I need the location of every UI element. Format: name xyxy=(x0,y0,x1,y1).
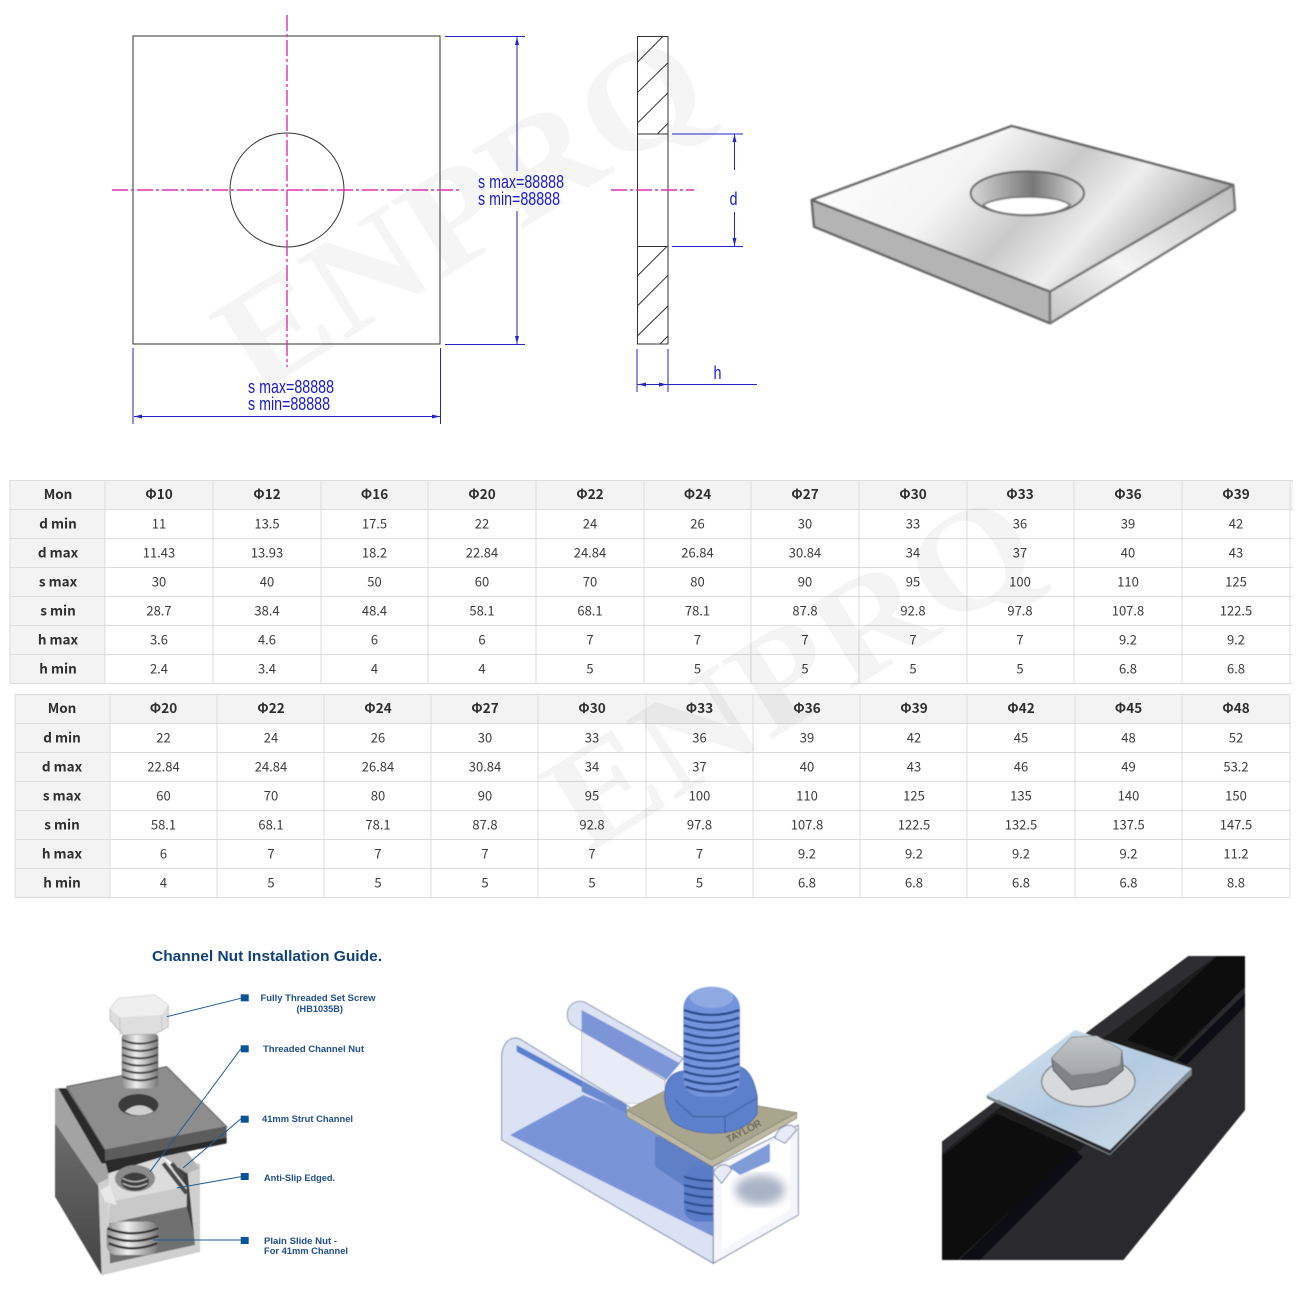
table 2 row h max: 9.2 xyxy=(798,844,816,862)
table 1 row s max: 95 xyxy=(906,572,920,590)
callout: HB1035B: (HB1035B) xyxy=(296,1004,343,1014)
table 1 row s min: 38.4 xyxy=(254,600,280,620)
table 1 row d min: 22 xyxy=(475,514,489,532)
table 1 header row: Φ20 xyxy=(468,483,496,503)
table 2 row s max: 140 xyxy=(1118,786,1139,804)
table 1 row h max: 9.2 xyxy=(1119,630,1137,648)
table 1 header row: Φ24 xyxy=(684,483,711,503)
table 1 row h min xyxy=(39,658,1245,678)
table 2 row h max: 9.2 xyxy=(905,844,923,862)
table 1 header row xyxy=(44,483,1250,503)
table 2 row h min: h min xyxy=(43,872,81,892)
table 1 row h max: h max xyxy=(38,628,79,648)
table 2 row h max: 6 xyxy=(160,844,167,862)
guide heading: Channel Nut Installation Guide. xyxy=(152,949,382,965)
table 1 row d max: 13.93 xyxy=(251,542,283,562)
leader lines and markers xyxy=(150,994,249,1244)
table 2 row d max: 24.84 xyxy=(255,756,287,776)
table 1 row s min: 87.8 xyxy=(792,600,818,620)
table 2 row s min: 78.1 xyxy=(365,814,391,834)
table 2 row s max: 90 xyxy=(478,786,492,804)
table 1 row d max: 22.84 xyxy=(466,542,498,562)
table 1 row d min: 42 xyxy=(1229,514,1243,532)
table 2 row h max: 7 xyxy=(696,844,703,862)
table 2 row d max: 26.84 xyxy=(362,756,394,776)
table 1 row h min: h min xyxy=(39,658,77,678)
table 1 row s max: 80 xyxy=(690,572,705,590)
table 1 row s max: 40 xyxy=(260,572,274,590)
table 1 row d min xyxy=(39,512,1243,532)
table 1 row h min: 5 xyxy=(694,658,701,678)
table 1 row d min: 24 xyxy=(583,514,597,532)
table 2 row d min: 39 xyxy=(800,728,814,746)
table 2 row d max: 40 xyxy=(800,756,814,776)
table 2 row s max: 60 xyxy=(156,786,171,804)
table 2 row s min: 137.5 xyxy=(1112,814,1145,834)
table 2 row s min xyxy=(44,814,1252,834)
table 2 row s min: 58.1 xyxy=(151,814,176,834)
table 2 row h min: 4 xyxy=(160,872,167,892)
table 1 header row: Φ33 xyxy=(1006,483,1034,503)
table 1 row s min: 107.8 xyxy=(1112,600,1144,620)
illustration: channel, plate, bolt and nut xyxy=(55,995,227,1275)
table 2 row h min: 5 xyxy=(696,872,703,892)
table 1 row d min: 13.5 xyxy=(254,514,280,532)
table 1 row s max: 100 xyxy=(1009,572,1031,590)
table 2 row d min: 30 xyxy=(478,728,492,746)
dimension label: right: s max=88888 xyxy=(478,172,564,192)
table 2 header row: Φ33 xyxy=(686,697,713,717)
table 2 row d max: 34 xyxy=(585,756,599,776)
table 2 row s max: 135 xyxy=(1010,786,1032,804)
TAYLOR mark on plate: TAYLOR xyxy=(725,1118,764,1146)
table 1 header row: Φ16 xyxy=(361,483,388,503)
table 2 row d max: d max xyxy=(42,756,83,776)
table 1 row d max: 11.43 xyxy=(143,542,175,562)
table 1 row s max: 110 xyxy=(1117,572,1139,590)
table 1 row s min: s min xyxy=(40,600,76,620)
table 2 row h max: 7 xyxy=(481,844,489,862)
table 2 row h min: 6.8 xyxy=(1012,872,1030,892)
table 1 row s max: s max xyxy=(39,570,78,590)
table 1 row d max: 40 xyxy=(1121,542,1135,562)
table 2 row d min: 33 xyxy=(585,728,599,746)
table 1 row d min: 26 xyxy=(690,514,705,532)
table 2 row d min: 52 xyxy=(1229,728,1243,746)
table 2 row d max: 49 xyxy=(1121,756,1136,776)
table 2 row d min xyxy=(43,726,1243,746)
table 1 row h min: 3.4 xyxy=(258,658,276,678)
table 1 row h max: 7 xyxy=(909,630,917,648)
table 2 row d max: 46 xyxy=(1014,756,1028,776)
table 2 row s max: 70 xyxy=(264,786,278,804)
table 1 row d max: 30.84 xyxy=(789,542,821,562)
table 1 row d min: 33 xyxy=(906,514,920,532)
table 2 row h min xyxy=(43,872,1245,892)
table 1 row s min: 48.4 xyxy=(362,600,387,620)
table 2 row s max: 100 xyxy=(689,786,710,804)
table 1 row d max: 26.84 xyxy=(681,542,714,562)
specification table 2 xyxy=(15,694,1290,898)
table 1 row h max: 9.2 xyxy=(1227,630,1245,648)
watermark: upper ENPRO: ENPRQ xyxy=(188,0,734,422)
illustration: transparent blue strut channel with plate washer xyxy=(502,987,798,1263)
table 2 row d min: d min xyxy=(43,726,81,746)
table 2 row s min: 87.8 xyxy=(472,814,498,834)
table 2 row h max: 11.2 xyxy=(1223,844,1249,862)
table 1 header row: Φ22 xyxy=(576,483,604,503)
table 1 row h min: 5 xyxy=(586,658,594,678)
table 2 row d min: 22 xyxy=(156,728,171,746)
table 1 row h min: 6.8 xyxy=(1227,658,1245,678)
table 2 row d min: 42 xyxy=(907,728,921,746)
table 1 row d min: 17.5 xyxy=(362,514,387,532)
table 2 header row: Mon xyxy=(48,697,76,717)
table 2 row h min: 5 xyxy=(374,872,382,892)
table 1 row s max: 60 xyxy=(475,572,489,590)
table 1 row s min: 97.8 xyxy=(1007,600,1033,620)
table 1 row d min: 11 xyxy=(152,514,166,532)
table 1 row s max: 30 xyxy=(152,572,166,590)
table 1 header row: Φ30 xyxy=(899,483,927,503)
callout: 41mm strut channel: 41mm Strut Channel xyxy=(262,1114,353,1124)
table 2 header row: Φ24 xyxy=(364,697,392,717)
table 2 row d max: 30.84 xyxy=(469,756,501,776)
table 2 row d max xyxy=(42,756,1249,776)
table 1 row s min: 78.1 xyxy=(685,600,710,620)
table 1 row d max: 18.2 xyxy=(362,542,387,562)
table 1 row d min: 36 xyxy=(1013,514,1027,532)
table 1 header row: Φ36 xyxy=(1114,483,1142,503)
table 2 header row: Φ36 xyxy=(793,697,821,717)
panel: channel nut installation guide xyxy=(55,949,382,1275)
dimension label: bottom: s max=88888 xyxy=(248,377,334,397)
table 1 header row: Φ27 xyxy=(791,483,819,503)
table 2 row d max: 22.84 xyxy=(147,756,180,776)
table 1 row s max: 90 xyxy=(798,572,812,590)
table 1 row d min: d min xyxy=(39,512,77,532)
dimension label: bottom xyxy=(248,377,334,414)
table 1 row d min: 30 xyxy=(798,514,812,532)
table 2 row s min: 107.8 xyxy=(791,814,823,834)
table 2 row s min: 97.8 xyxy=(687,814,712,834)
table 1 row h min: 4 xyxy=(371,658,378,678)
table 1 row h min: 5 xyxy=(909,658,917,678)
table 1 header row: Φ10 xyxy=(145,483,173,503)
table 1 row s max: 50 xyxy=(367,572,382,590)
dimension letter h: h xyxy=(714,363,722,383)
table 1 row s max xyxy=(39,570,1247,590)
table 1 row h max: 4.6 xyxy=(258,630,276,648)
table 1 row d min: 39 xyxy=(1121,514,1135,532)
table 1 row h min: 5 xyxy=(801,658,809,678)
table 1 row d max: 24.84 xyxy=(574,542,606,562)
table 2 row h min: 5 xyxy=(481,872,489,892)
table 1 header row: Φ39 xyxy=(1222,483,1250,503)
3D view of square washer xyxy=(812,126,1235,323)
table 2 header row: Φ30 xyxy=(578,697,606,717)
table 1 row h max: 7 xyxy=(586,630,594,648)
table 1 row h min: 2.4 xyxy=(150,658,168,678)
callout: anti-slip edged: Anti-Slip Edged. xyxy=(264,1173,335,1183)
table 2 row h max: 9.2 xyxy=(1119,844,1138,862)
table 1 row h min: 5 xyxy=(1016,658,1024,678)
table 1 row h max: 7 xyxy=(1016,630,1024,648)
table 2 row h max: 7 xyxy=(374,844,382,862)
table 1 row d max xyxy=(38,542,1243,562)
table 2 row d max: 37 xyxy=(692,756,707,776)
table 1 row s min: 92.8 xyxy=(900,600,926,620)
table 2 row h max xyxy=(42,842,1249,862)
table 2 header row xyxy=(48,697,1250,717)
callout: plain slide nut: Plain Slide Nut - xyxy=(264,1236,337,1246)
table 1 row s min: 68.1 xyxy=(577,600,603,620)
table 1 row s min: 58.1 xyxy=(469,600,495,620)
table 2 row h min: 6.8 xyxy=(1119,872,1138,892)
table 1 row h max: 7 xyxy=(694,630,701,648)
table 2 row h max: 7 xyxy=(588,844,596,862)
callout: fully threaded set screw: Fully Threaded Set Screw xyxy=(260,993,376,1003)
table 2 row h min: 5 xyxy=(267,872,275,892)
table 2 row s min: s min xyxy=(44,814,80,834)
table 2 row s max: s max xyxy=(43,784,82,804)
table 2 row d max: 43 xyxy=(907,756,921,776)
table 2 row s max xyxy=(43,784,1247,804)
table 1 row h max: 6 xyxy=(371,630,378,648)
table 2 row d max: 53.2 xyxy=(1223,756,1249,776)
table 2 row h max: h max xyxy=(42,842,83,862)
table 2 row s max: 80 xyxy=(371,786,385,804)
table 1 row h min: 4 xyxy=(478,658,486,678)
table 1 row s min xyxy=(40,600,1252,620)
table 2 header row: Φ42 xyxy=(1007,697,1035,717)
dimension label: bottom: s min=88888 xyxy=(248,394,330,414)
table 2 row h min: 6.8 xyxy=(798,872,816,892)
table 2 header row: Φ27 xyxy=(471,697,499,717)
watermark: lower ENPRO over tables: ENPRQ xyxy=(518,459,1064,882)
table 2 row s min: 92.8 xyxy=(579,814,605,834)
table 2 row h min: 6.8 xyxy=(905,872,923,892)
table 2 row d min: 48 xyxy=(1121,728,1136,746)
table 1 row h max: 7 xyxy=(801,630,809,648)
table 1 row h max xyxy=(38,628,1245,648)
dimension letter d: d xyxy=(730,189,738,209)
table 1 row d max: d max xyxy=(38,542,79,562)
specification table 1 xyxy=(10,480,1293,684)
table 1 row s min: 122.5 xyxy=(1220,600,1252,620)
table 1 row h max: 6 xyxy=(478,630,486,648)
table 1 row h min: 6.8 xyxy=(1119,658,1137,678)
table 2 header row: Φ20 xyxy=(150,697,177,717)
dimension label: right xyxy=(478,172,564,209)
table 1 row h max: 3.6 xyxy=(150,630,168,648)
table 2 row h min: 8.8 xyxy=(1227,872,1245,892)
table 2 header row: Φ45 xyxy=(1115,697,1142,717)
table 1 row s min: 28.7 xyxy=(146,600,172,620)
table 2 row s max: 125 xyxy=(903,786,925,804)
table 2 row d min: 24 xyxy=(264,728,278,746)
technical drawing: front view of square washer xyxy=(112,15,564,424)
callout: for 41mm channel: For 41mm Channel xyxy=(264,1246,348,1256)
table 2 row s min: 122.5 xyxy=(898,814,930,834)
table 1 row d max: 37 xyxy=(1013,542,1027,562)
table 2 header row: Φ39 xyxy=(900,697,928,717)
photo: zinc plate washer bolted to black strut xyxy=(942,956,1245,1260)
table 1 row d max: 43 xyxy=(1229,542,1243,562)
table 2 row s min: 147.5 xyxy=(1220,814,1252,834)
callout: threaded channel nut: Threaded Channel Nut xyxy=(263,1044,364,1054)
table 2 header row: Φ48 xyxy=(1222,697,1250,717)
table 2 row s min: 68.1 xyxy=(258,814,284,834)
technical drawing: section view xyxy=(611,36,757,392)
table 2 row s min: 132.5 xyxy=(1005,814,1037,834)
table 2 row d min: 36 xyxy=(692,728,707,746)
table 1 row s max: 70 xyxy=(583,572,597,590)
table 1 header row: Φ12 xyxy=(253,483,281,503)
table 2 row s max: 95 xyxy=(585,786,599,804)
table 2 row d min: 45 xyxy=(1014,728,1028,746)
table 2 row h max: 9.2 xyxy=(1012,844,1030,862)
table 1 row d max: 34 xyxy=(906,542,920,562)
table 2 row h min: 5 xyxy=(588,872,596,892)
table 2 row s max: 150 xyxy=(1225,786,1247,804)
table 2 row s max: 110 xyxy=(796,786,818,804)
table 1 row s max: 125 xyxy=(1225,572,1247,590)
table 1 header row: Mon xyxy=(44,483,72,503)
table 2 row d min: 26 xyxy=(371,728,385,746)
table 2 header row: Φ22 xyxy=(257,697,285,717)
table 2 row h max: 7 xyxy=(267,844,275,862)
dimension label: right: s min=88888 xyxy=(478,189,560,209)
